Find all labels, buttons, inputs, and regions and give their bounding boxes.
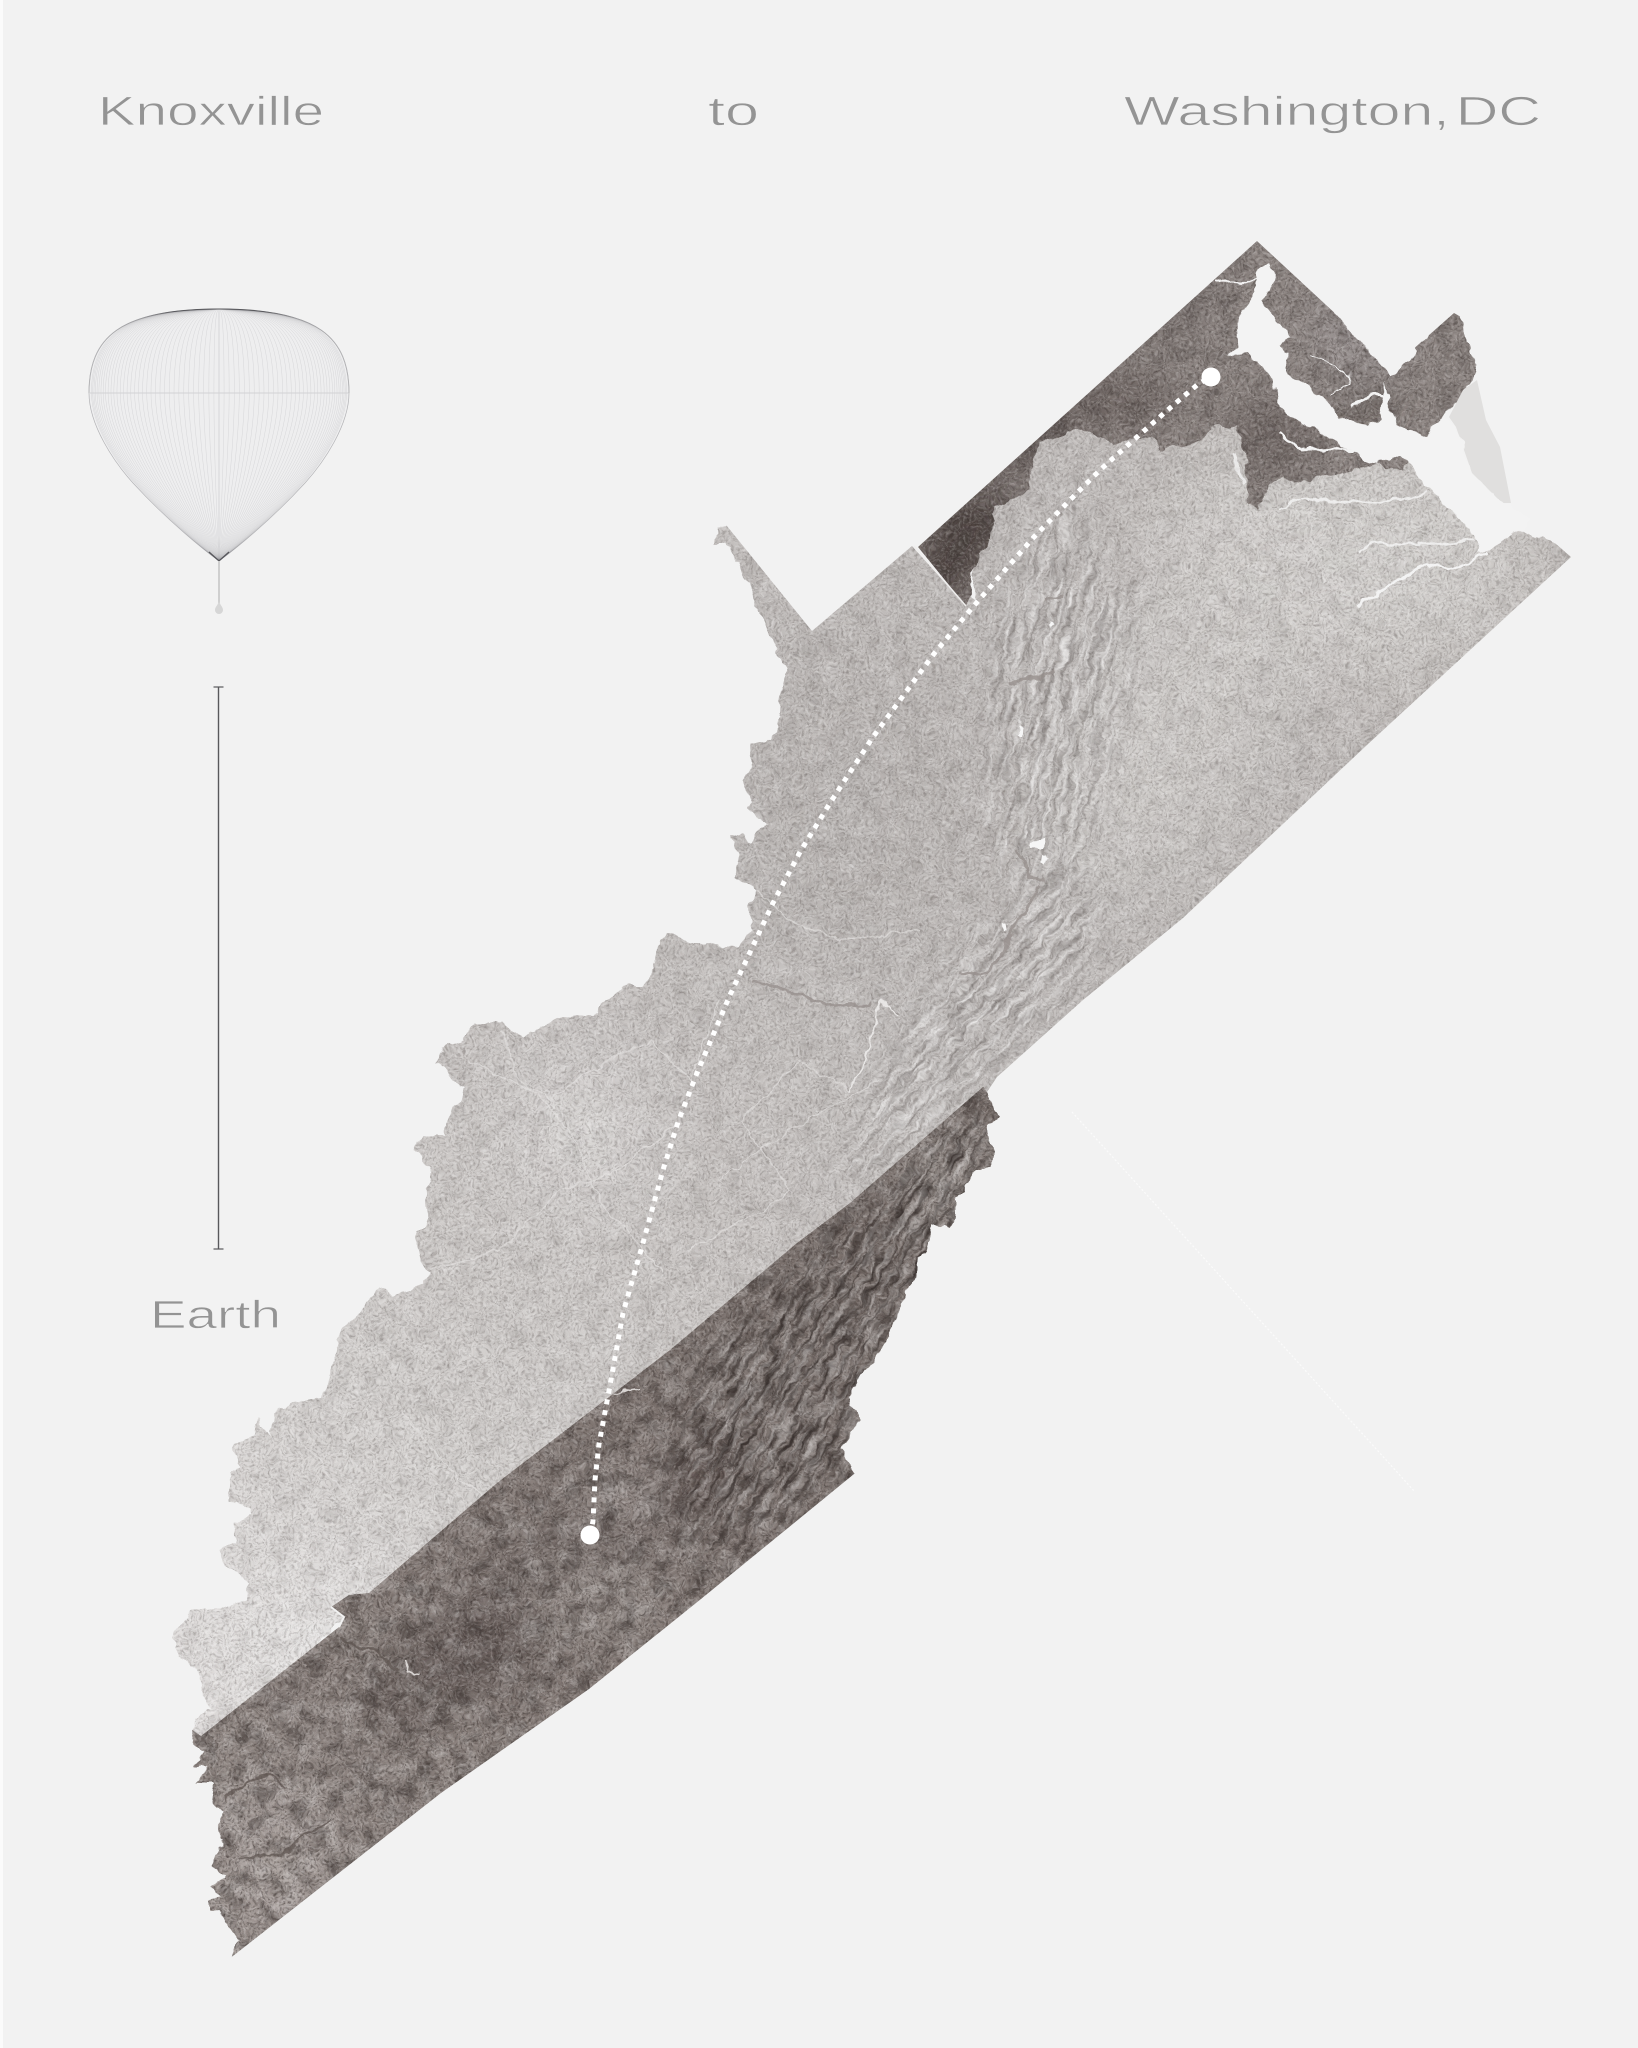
scale bar <box>214 687 224 1249</box>
terrain mid tones <box>150 1050 1050 2000</box>
balloon neck <box>209 552 229 561</box>
western seam of dark wedge <box>914 546 966 606</box>
balloon equator <box>90 392 349 394</box>
reservoir lines <box>753 598 1063 1007</box>
title: Washington, DC: Washington, DC <box>1124 88 1541 134</box>
ridge and valley stripes, south <box>829 856 1114 1190</box>
balloon envelope <box>89 309 349 561</box>
white water marks <box>1002 620 1052 931</box>
marker: Knoxville <box>580 1526 600 1544</box>
balloon gores <box>91 309 347 561</box>
terrain grain <box>150 1050 1050 2000</box>
map: pale Delmarva shore <box>1449 380 1511 503</box>
balloon tether <box>218 561 220 603</box>
balloon payload <box>215 601 223 614</box>
faint dotted line <box>1072 1112 1415 1492</box>
Tennessee rivers <box>225 1640 400 1860</box>
marker: Washington, DC <box>1202 368 1220 386</box>
white river <box>850 1000 898 1090</box>
route: dotted flight path <box>590 377 1210 1535</box>
map: dark northern band <box>895 220 1520 630</box>
terrain mid tones <box>900 220 1520 630</box>
terrain mid tones <box>181 424 1570 1736</box>
tonal patches <box>895 236 1410 620</box>
icon: high-altitude balloon <box>89 309 349 614</box>
tributaries <box>1216 280 1486 605</box>
bay <box>1227 262 1530 553</box>
map: light terrain band <box>172 424 1571 1736</box>
map: Chesapeake Bay and rivers <box>1216 262 1530 605</box>
terrain grain <box>150 400 1600 1800</box>
left edge band <box>0 0 3 2048</box>
ridge and valley stripes, north <box>970 493 1152 896</box>
balloon crown <box>89 309 349 393</box>
ridges <box>294 757 1386 1843</box>
rivers <box>190 890 920 1690</box>
seam at state notch <box>331 1607 344 1627</box>
tonal patches <box>220 1110 1000 1950</box>
terrain grain <box>900 220 1520 630</box>
label: Earth: Earth <box>150 1294 281 1337</box>
pale lake flecks <box>405 1388 640 1675</box>
title: to: to <box>708 88 759 134</box>
map: dark Tennessee band <box>192 1087 1000 1957</box>
tonal patches <box>200 450 1530 1710</box>
title: Knoxville: Knoxville <box>98 88 324 134</box>
